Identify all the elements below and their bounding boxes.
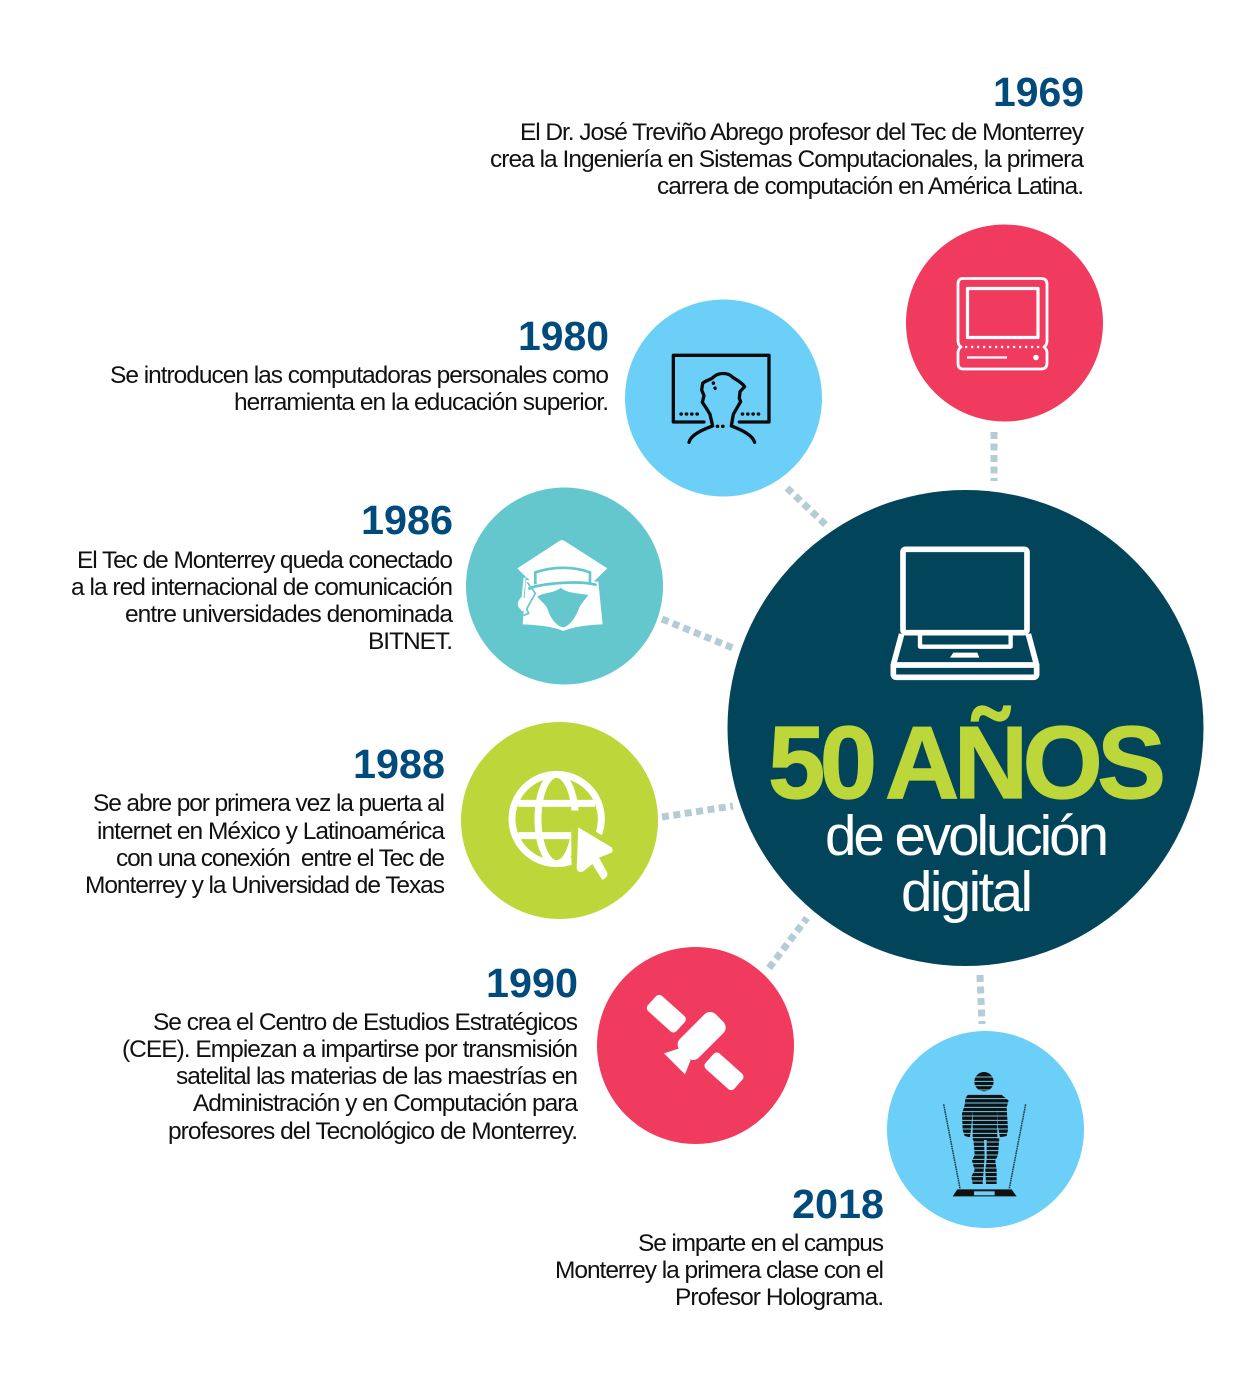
text 1969: carrera de computación en América Latina. [657, 173, 1084, 200]
circle icon: vintage computer [906, 224, 1103, 422]
text 1990: (CEE). Empiezan a impartirse por transmisión [122, 1036, 578, 1063]
text 1990: profesores del Tecnológico de Monterrey. [168, 1118, 578, 1145]
text 1988 [85, 790, 445, 899]
circle icon: graduate [466, 488, 663, 684]
text 1986: El Tec de Monterrey queda conectado [77, 547, 453, 574]
circle icon: globe and cursor [461, 722, 658, 919]
text 1990 [122, 1009, 578, 1145]
year 1986: 1986 [361, 497, 453, 543]
text 1969: El Dr. José Treviño Abrego profesor del Tec de Monterrey [520, 119, 1085, 146]
text 1980 [110, 362, 609, 416]
text 1980: Se introducen las computadoras personales como [110, 362, 609, 389]
circle icon: satellite [597, 947, 794, 1144]
panel: 1990 [122, 947, 794, 1145]
panel: 1980 [110, 300, 822, 496]
text 1988: con una conexión entre el Tec de [116, 845, 445, 872]
text 1988: Se abre por primera vez la puerta al [93, 790, 445, 817]
central circle: 50 años [728, 490, 1204, 966]
subtitle: de evolución: de evolución [825, 804, 1109, 867]
year 1969: 1969 [993, 69, 1084, 115]
title: 50 AÑOS: 50 AÑOS [768, 705, 1166, 820]
year 1988: 1988 [353, 741, 445, 787]
panel: 2018 [555, 1031, 1084, 1311]
text 1986: a la red internacional de comunicación [71, 574, 453, 601]
subtitle: digital: digital [901, 860, 1033, 923]
year 1980: 1980 [518, 313, 609, 359]
text 1990: Administración y en Computación para [193, 1090, 578, 1117]
connectors: dotted lines [662, 432, 994, 1024]
circle icon: person at screen [625, 300, 822, 496]
text 2018: Se imparte en el campus [638, 1230, 884, 1257]
circle icon: hologram [887, 1031, 1084, 1228]
panel: 1988 [85, 722, 658, 919]
text 1986 [71, 547, 453, 655]
panel: 1969 [490, 69, 1103, 422]
text 1986: entre universidades denominada [125, 601, 453, 628]
text 1988: Monterrey y la Universidad de Texas [85, 872, 445, 899]
text 1990: Se crea el Centro de Estudios Estratégicos [153, 1009, 578, 1036]
text 2018 [555, 1230, 884, 1311]
text 1969: crea la Ingeniería en Sistemas Computacionales, la primera [490, 146, 1084, 173]
year 2018: 2018 [792, 1181, 884, 1227]
text 1988: internet en México y Latinoamérica [97, 818, 445, 845]
text 1986: BITNET. [368, 628, 453, 655]
year 1990: 1990 [486, 960, 578, 1006]
text 2018: Monterrey la primera clase con el [555, 1257, 884, 1284]
text 1990: satelital las materias de las maestrías en [176, 1063, 578, 1090]
text 2018: Profesor Holograma. [675, 1284, 884, 1311]
panel: 1986 [71, 488, 663, 684]
text 1980: herramienta en la educación superior. [234, 389, 609, 416]
icon: laptop [893, 549, 1037, 677]
text 1969 [490, 119, 1085, 200]
